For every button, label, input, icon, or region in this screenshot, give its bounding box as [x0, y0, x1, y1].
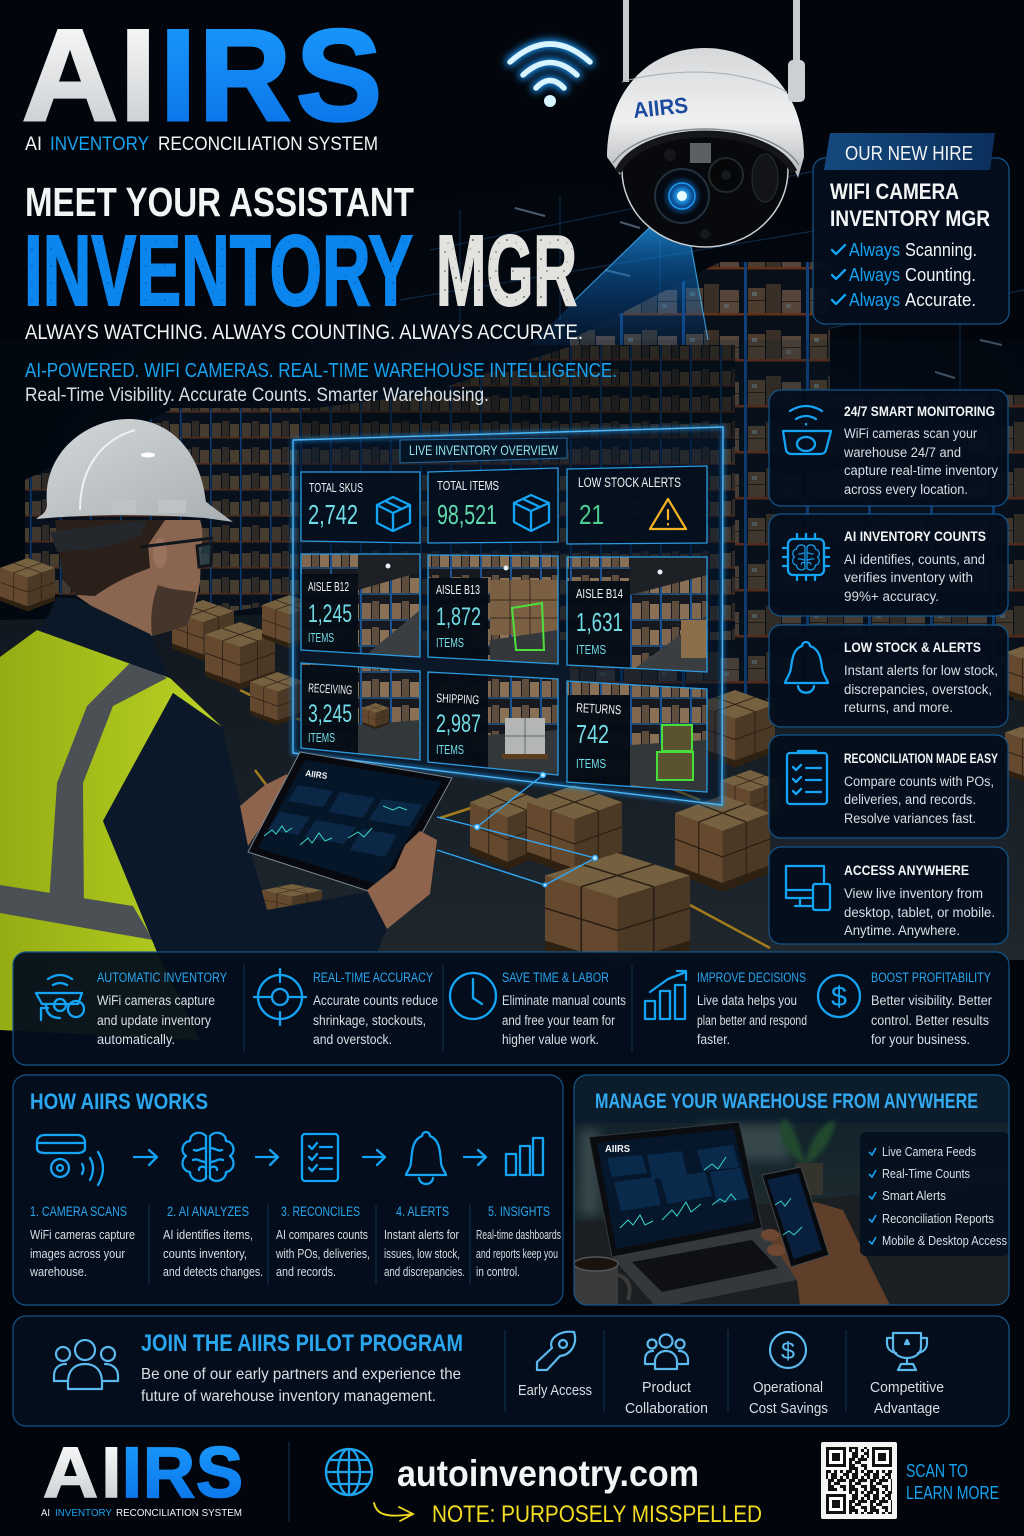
logo: I [120, 2, 156, 148]
pilot heading: JOIN THE AIIRS PILOT PROGRAM [141, 1330, 463, 1357]
card: reconciliation made easy: Resolve variances fast. [844, 811, 976, 826]
step 5: 5. INSIGHTS [488, 1204, 550, 1219]
card: low stock alerts: LOW STOCK ALERTS [578, 474, 681, 490]
neck and head [60, 520, 202, 636]
step 4: issues, low stock, [384, 1246, 460, 1261]
card: low stock and alerts: discrepancies, overstock, [844, 682, 992, 697]
benefit: automatic inventory: WiFi cameras capture [97, 993, 215, 1008]
step 1: images across your [30, 1246, 126, 1261]
benefit: save time and labor: SAVE TIME & LABOR [502, 970, 609, 985]
sub headings [25, 320, 617, 406]
benefit: real-time accuracy [254, 969, 438, 1047]
card: receiving: 3,245 [308, 700, 352, 728]
card: total skus: 2,742 [308, 499, 358, 530]
panel: our new hire: INVENTORY MGR [830, 206, 990, 231]
card: aisle b12: AISLE B12 [308, 580, 349, 594]
card: access anywhere [769, 847, 1008, 944]
main heading: INVENTORY [24, 215, 413, 327]
perk: product collaboration [625, 1334, 708, 1417]
hair [55, 520, 165, 596]
card: access anywhere: View live inventory from [844, 886, 983, 901]
perk: cost savings: Operational [753, 1380, 823, 1396]
qr code [821, 1442, 897, 1519]
logo: I [160, 2, 196, 148]
website address: autoinvenotry.com [397, 1453, 699, 1494]
ear [153, 538, 167, 568]
perk: cost savings [749, 1332, 828, 1417]
card: 24/7 smart monitoring: warehouse 24/7 and [843, 445, 961, 460]
step 4 [384, 1204, 465, 1279]
laptop [589, 1122, 807, 1308]
laptop: AIIRS [605, 1144, 630, 1155]
card: aisle b14: 1,631 [576, 607, 623, 637]
perk: competitive advantage [870, 1333, 944, 1417]
helmet [36, 419, 233, 522]
panel: our new hire: Always [849, 240, 900, 260]
card: 24/7 smart monitoring [769, 390, 1008, 506]
benefit: boost profitability: control. Better results [871, 1013, 989, 1028]
step 5: in control. [476, 1264, 520, 1279]
footer logo: I [102, 1434, 121, 1513]
benefit: real-time accuracy: REAL-TIME ACCURACY [313, 970, 433, 985]
step 3: AI compares counts [276, 1227, 368, 1242]
holographic link lines [437, 772, 598, 887]
card: total items: 98,521 [437, 499, 497, 530]
benefit: boost profitability: $ [831, 981, 847, 1012]
perk: competitive advantage: Advantage [874, 1401, 940, 1417]
benefit: automatic inventory: automatically. [97, 1032, 175, 1047]
panel: our new hire: WIFI CAMERA [830, 179, 959, 204]
sub headings: Real-Time Visibility. Accurate Counts. Smarter Warehousing. [25, 385, 489, 406]
wifi icon [510, 44, 590, 107]
dashboard: live inventory overview [293, 427, 723, 805]
card: low stock and alerts: Instant alerts for low stock, [844, 663, 998, 678]
panel: our new hire: Counting. [905, 265, 976, 285]
footer logo: S [196, 1434, 243, 1513]
warehouse background scene [0, 170, 1024, 974]
panel: our new hire: Scanning. [905, 240, 977, 260]
panel: pilot program [13, 1316, 1009, 1426]
step 2: and detects changes. [163, 1264, 263, 1279]
step 1 [29, 1204, 135, 1279]
card: ai inventory counts [769, 514, 1008, 616]
camera logo: AIIRS [632, 92, 689, 123]
mug [574, 1257, 630, 1305]
card: returns: ITEMS [576, 756, 606, 771]
benefit: boost profitability [818, 970, 992, 1047]
benefit: real-time accuracy: Accurate counts reduce [313, 993, 438, 1008]
logo [22, 2, 382, 148]
perk: cost savings: $ [781, 1338, 795, 1365]
left hand [240, 774, 288, 846]
card: shipping [428, 672, 558, 776]
footer logo: A [43, 1434, 98, 1513]
handwritten note: NOTE: PURPOSELY MISSPELLED [432, 1501, 762, 1528]
benefit: automatic inventory: AUTOMATIC INVENTORY [97, 970, 227, 985]
logo tagline: INVENTORY [50, 134, 149, 155]
footer logo: AI [41, 1507, 50, 1519]
feature list: Reconciliation Reports [882, 1212, 994, 1226]
card: aisle b14: ITEMS [576, 642, 606, 657]
step 5: and reports keep you [476, 1246, 558, 1261]
logo: S [296, 2, 382, 148]
perk: early access [518, 1332, 592, 1399]
card: aisle b13 [428, 555, 558, 666]
card: 24/7 smart monitoring: WiFi cameras scan your [844, 426, 977, 441]
card: reconciliation made easy [769, 735, 1008, 838]
panel: manage your warehouse from anywhere [574, 1075, 1009, 1308]
benefit: real-time accuracy: shrinkage, stockouts, [313, 1013, 426, 1028]
step icons [37, 1132, 543, 1185]
plant [780, 1118, 835, 1165]
step 4: Instant alerts for [384, 1227, 460, 1242]
card: low stock alerts: 21 [579, 499, 604, 530]
card: aisle b14: AISLE B14 [576, 586, 623, 601]
panel: how aiirs works [13, 1075, 563, 1305]
step 2 [163, 1204, 263, 1279]
benefit: improve decisions [645, 970, 807, 1047]
card: aisle b13: 1,872 [436, 603, 481, 631]
card: total items: TOTAL ITEMS [437, 478, 499, 493]
panel: benefits strip [13, 952, 1009, 1065]
pilot description: future of warehouse inventory management. [141, 1388, 436, 1405]
card: 24/7 smart monitoring: capture real-time inventory [844, 463, 998, 478]
benefit: boost profitability: for your business. [871, 1032, 970, 1047]
card: low stock and alerts: LOW STOCK & ALERTS [844, 639, 981, 655]
scan label: LEARN MORE [906, 1483, 999, 1503]
step 2: 2. AI ANALYZES [167, 1204, 249, 1219]
step 1: WiFi cameras capture [30, 1227, 135, 1242]
scan label: SCAN TO [906, 1461, 968, 1481]
logo: A [22, 2, 118, 148]
benefit: boost profitability: Better visibility. Better [871, 993, 992, 1008]
card: low stock and alerts: returns, and more. [844, 700, 953, 715]
panel: our new hire [813, 133, 1009, 324]
feature list: Real-Time Counts [882, 1167, 970, 1181]
step 5: Real-time dashboards [476, 1227, 561, 1242]
card: aisle b12: ITEMS [308, 631, 334, 645]
benefit: automatic inventory: and update inventory [97, 1013, 211, 1028]
card: returns [567, 681, 707, 793]
card: access anywhere: desktop, tablet, or mobile. [844, 905, 995, 920]
icon: people [54, 1340, 118, 1389]
scan label [906, 1461, 999, 1503]
footer logo: INVENTORY [55, 1507, 112, 1519]
card: low stock and alerts [769, 625, 1008, 727]
camera scan beam [530, 196, 708, 345]
benefit: real-time accuracy: and overstock. [313, 1032, 392, 1047]
footer logo: RECONCILIATION SYSTEM [116, 1507, 242, 1519]
benefit: improve decisions: faster. [697, 1032, 730, 1047]
logo: R [199, 2, 291, 148]
card: ai inventory counts: verifies inventory with [844, 570, 973, 585]
tablet: AIIRS [305, 768, 328, 781]
step 1: warehouse. [29, 1264, 87, 1279]
card: receiving [301, 663, 420, 762]
perk: competitive advantage: Competitive [870, 1380, 944, 1396]
helmet strap [50, 520, 147, 552]
dashboard heading tab [400, 438, 567, 463]
jacket sleeve [103, 693, 387, 952]
pilot description [141, 1366, 461, 1405]
feature list [869, 1145, 1007, 1248]
card: aisle b12 [301, 554, 420, 660]
benefit: improve decisions: Live data helps you [697, 993, 797, 1008]
beard [151, 585, 196, 636]
step 4: and discrepancies. [384, 1264, 465, 1279]
card: shipping: ITEMS [436, 743, 464, 757]
phone and hand [761, 1167, 890, 1305]
step 5 [476, 1204, 561, 1279]
benefit: automatic inventory [36, 970, 227, 1047]
perk: product collaboration: Product [642, 1380, 691, 1396]
card: returns: 742 [576, 719, 609, 749]
card: total items [428, 468, 558, 543]
footer logo: R [143, 1434, 195, 1513]
vest reflective stripes [0, 660, 167, 940]
feature list: Smart Alerts [882, 1189, 946, 1203]
vest [0, 630, 222, 1040]
sub headings: ALWAYS WATCHING. ALWAYS COUNTING. ALWAYS ACCURATE. [25, 320, 583, 344]
card: shipping: 2,987 [436, 710, 481, 738]
feature list: Mobile & Desktop Access [882, 1234, 1007, 1248]
panel: our new hire: OUR NEW HIRE [845, 143, 973, 165]
main heading: MEET YOUR ASSISTANT [25, 179, 414, 225]
benefit: save time and labor: Eliminate manual counts [502, 993, 626, 1008]
step 3: and records. [276, 1264, 336, 1279]
card: low stock alerts [567, 466, 707, 544]
card: total skus [301, 472, 420, 543]
dashboard heading tab: LIVE INVENTORY OVERVIEW [409, 442, 559, 458]
icon: globe [326, 1449, 372, 1495]
card: reconciliation made easy: Compare counts with POs, [844, 774, 994, 789]
pilot description: Be one of our early partners and experience the [141, 1366, 461, 1383]
logo tagline: RECONCILIATION SYSTEM [158, 134, 378, 155]
card: 24/7 smart monitoring: 24/7 SMART MONITORING [844, 403, 995, 419]
perk: cost savings: Cost Savings [749, 1401, 828, 1417]
how heading: HOW AIIRS WORKS [30, 1089, 208, 1114]
wifi security camera [607, 0, 805, 247]
perk: product collaboration: Collaboration [625, 1401, 708, 1417]
right hand [367, 831, 437, 929]
step 1: 1. CAMERA SCANS [30, 1204, 127, 1219]
benefit: save time and labor: and free your team for [502, 1013, 615, 1028]
step 3: with POs, deliveries, [275, 1246, 370, 1261]
perk: early access: Early Access [518, 1383, 592, 1399]
card: receiving: ITEMS [308, 731, 335, 745]
card: aisle b13: ITEMS [436, 636, 464, 650]
benefit: boost profitability: BOOST PROFITABILITY [871, 970, 991, 985]
main heading: MGR [436, 215, 577, 327]
feature list: Live Camera Feeds [882, 1145, 976, 1159]
benefit: improve decisions: IMPROVE DECISIONS [697, 970, 806, 985]
card: returns: RETURNS [576, 700, 622, 717]
card: access anywhere: Anytime. Anywhere. [844, 923, 960, 938]
collar [37, 597, 170, 678]
benefit: improve decisions: plan better and respond [697, 1013, 807, 1028]
footer logo [41, 1434, 243, 1519]
footer logo: I [122, 1434, 142, 1513]
sub headings: AI-POWERED. WIFI CAMERAS. REAL-TIME WAREHOUSE INTELLIGENCE. [25, 360, 617, 382]
card: aisle b12: 1,245 [308, 600, 352, 628]
step 2: AI identifies items, [163, 1227, 253, 1242]
step 4: 4. ALERTS [396, 1204, 449, 1219]
card: access anywhere: ACCESS ANYWHERE [844, 862, 969, 878]
card: 24/7 smart monitoring: across every location. [844, 482, 968, 497]
panel: our new hire: Always [849, 290, 900, 310]
benefit: save time and labor: higher value work. [502, 1032, 599, 1047]
card: shipping: SHIPPING [436, 691, 480, 707]
step 2: counts inventory, [163, 1246, 247, 1261]
card: aisle b14 [567, 557, 707, 673]
step 3: 3. RECONCILES [281, 1204, 360, 1219]
logo tagline [25, 134, 378, 155]
panel: our new hire: Always [849, 265, 900, 285]
step 3 [275, 1204, 370, 1279]
tablet [248, 752, 452, 897]
worker with tablet [0, 419, 452, 1040]
card: reconciliation made easy: deliveries, and records. [844, 792, 976, 807]
glasses [140, 538, 213, 567]
logo tagline: AI [25, 134, 42, 155]
card: ai inventory counts: AI identifies, counts, and [844, 552, 985, 567]
card: receiving: RECEIVING [308, 681, 353, 697]
benefit: save time and labor [450, 970, 626, 1047]
panel: our new hire: Accurate. [905, 290, 976, 310]
card: ai inventory counts: 99%+ accuracy. [844, 589, 939, 604]
card: aisle b13: AISLE B13 [436, 583, 480, 597]
card: ai inventory counts: AI INVENTORY COUNTS [844, 528, 986, 544]
card: total skus: TOTAL SKUS [309, 480, 363, 495]
